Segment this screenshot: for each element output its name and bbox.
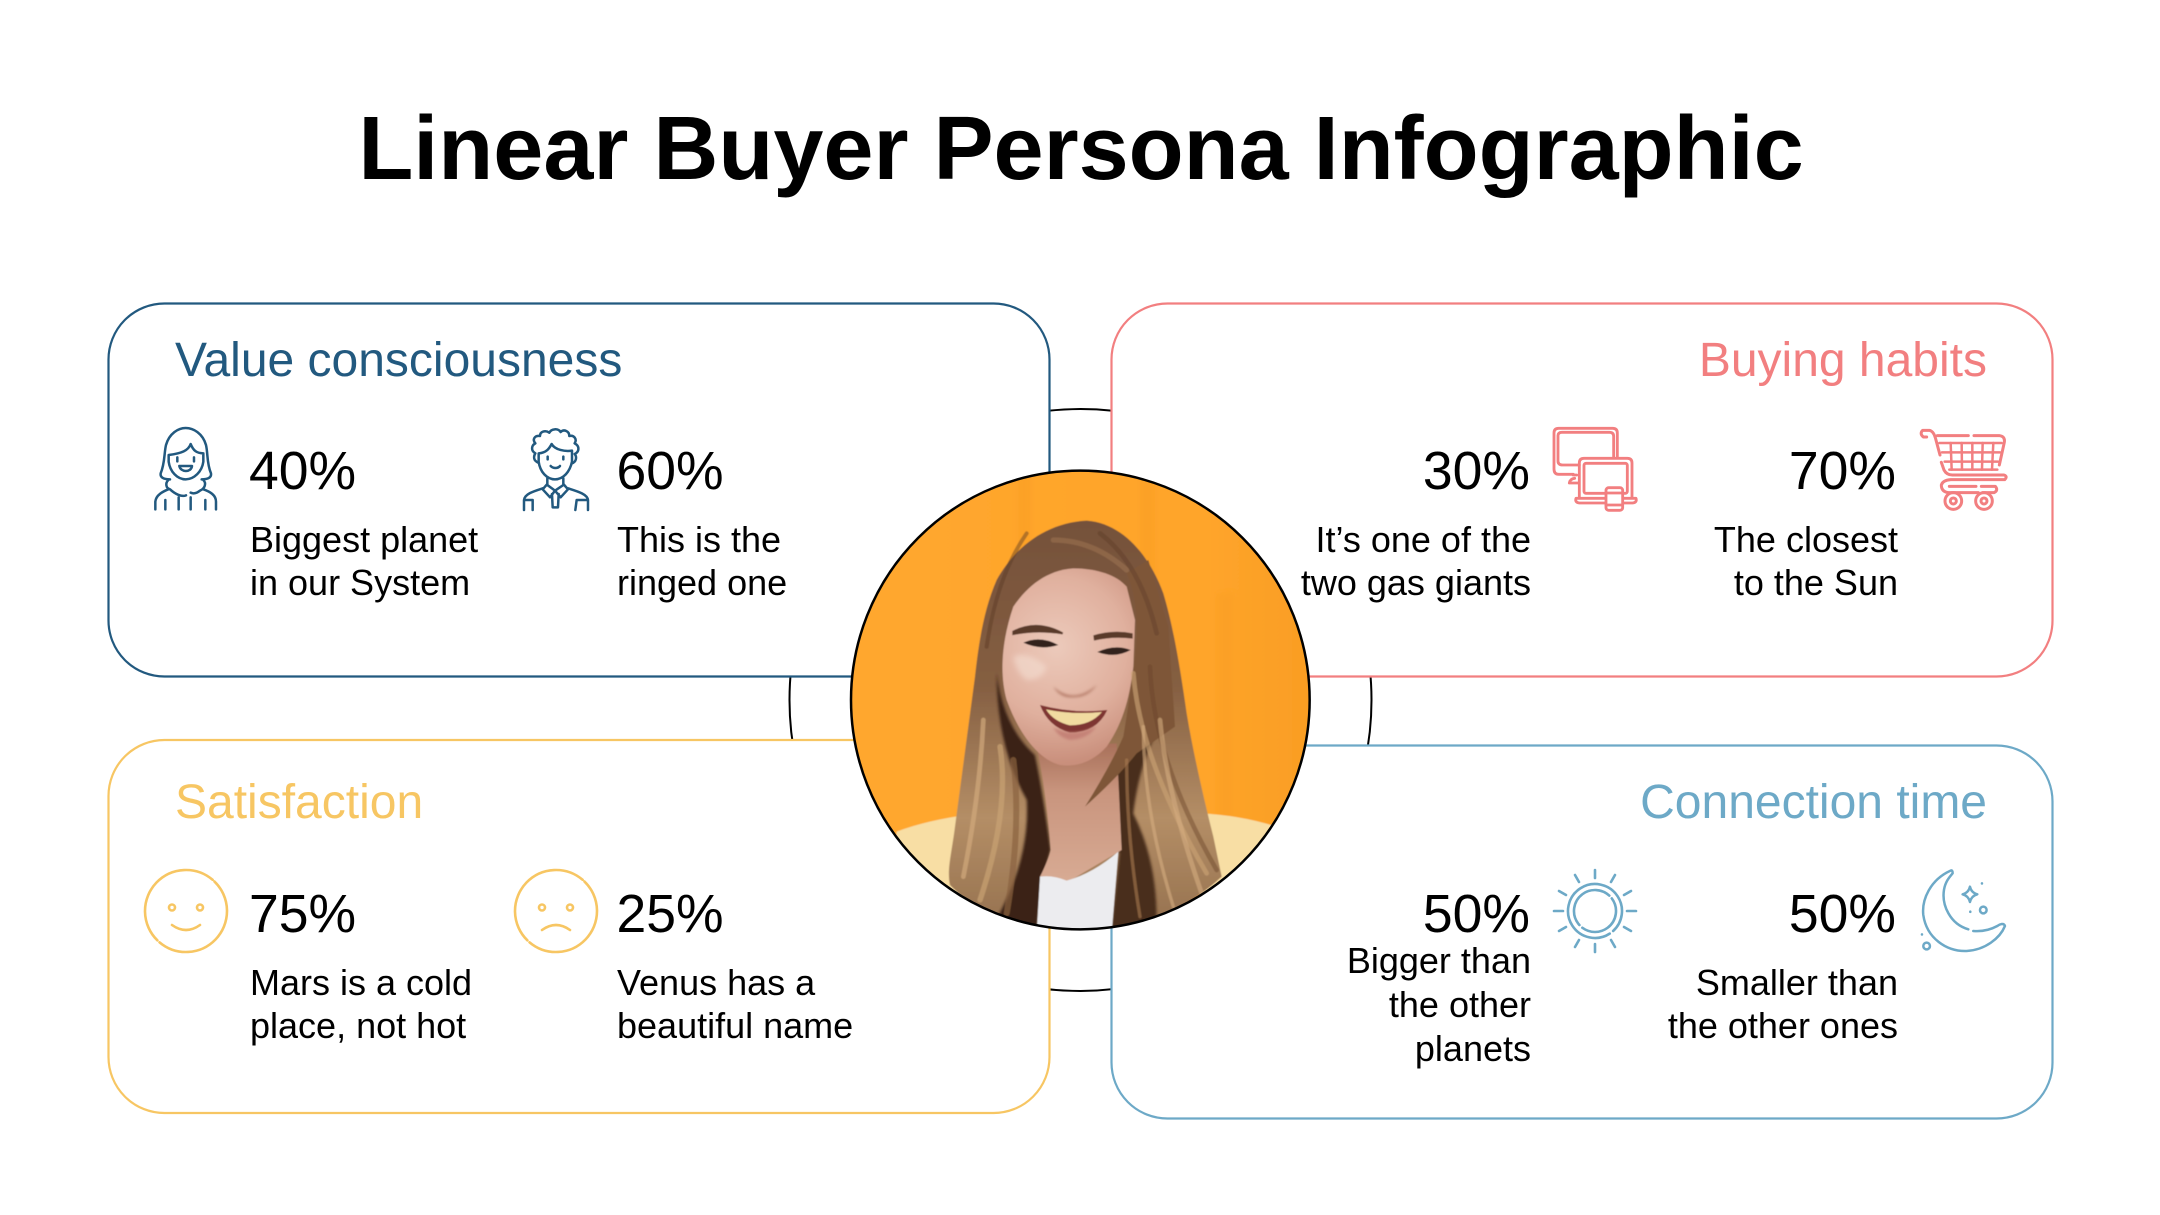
- stat: 25%: 25%: [616, 885, 724, 944]
- stat: 60%: 60%: [616, 442, 724, 501]
- panel outline: [108, 304, 1050, 676]
- text: smaller than: Smaller than: [1696, 962, 1898, 1003]
- icon: woman: [155, 428, 216, 509]
- stat: 70%: 70%: [1789, 442, 1896, 501]
- stat: 40%: 40%: [249, 442, 356, 501]
- text: biggest planet: Biggest planet: [250, 519, 478, 560]
- panel outline: [108, 740, 1050, 1113]
- stat: 75%: 75%: [249, 885, 356, 944]
- icon: cart: [1921, 430, 2006, 509]
- icon: devices: [1554, 428, 1636, 510]
- panel outline: [1112, 304, 2052, 676]
- text: ringed one: This is the: [617, 519, 781, 560]
- text: mars: place, not hot: [250, 1005, 466, 1046]
- text: closest to the sun: to the Sun: [1734, 562, 1898, 603]
- icon: moon: [1922, 870, 2005, 951]
- panel: buying habits: [1112, 304, 2052, 676]
- heading: value consciousness: Value consciousness: [175, 334, 622, 387]
- icon: sun: [1554, 870, 1636, 952]
- stat: 50% smaller: 50%: [1789, 885, 1896, 944]
- photo background: [852, 472, 1308, 903]
- panel outline: [1112, 746, 2052, 1118]
- panel: connection time: [1112, 746, 2052, 1118]
- panel: value consciousness: [108, 304, 1050, 676]
- connector ring behind panels: [790, 409, 1372, 991]
- heading: satisfaction: Satisfaction: [175, 776, 423, 829]
- text: gas giants: It’s one of the: [1316, 519, 1531, 560]
- heading: buying habits: Buying habits: [1699, 334, 1987, 387]
- panel: satisfaction: [108, 740, 1050, 1113]
- text: venus: beautiful name: [617, 1005, 853, 1046]
- text: closest to the sun: The closest: [1714, 519, 1898, 560]
- stat: 30%: 30%: [1423, 442, 1530, 501]
- text: mars: Mars is a cold: [250, 962, 472, 1003]
- photo: smiling woman in a circle: [840, 460, 1330, 940]
- text: bigger than: the other: [1389, 984, 1531, 1025]
- text: ringed one: ringed one: [617, 562, 787, 603]
- text: bigger than: Bigger than: [1347, 940, 1531, 981]
- text: smaller than: the other ones: [1668, 1005, 1898, 1046]
- text: venus: Venus has a: [617, 962, 815, 1003]
- heading: connection time: Connection time: [1640, 776, 1987, 829]
- stat: 50% bigger: 50%: [1423, 885, 1530, 944]
- text: gas giants: two gas giants: [1301, 562, 1531, 603]
- icon: sad face: [498, 853, 614, 969]
- photo border: [851, 471, 1310, 929]
- text: bigger than: planets: [1415, 1028, 1531, 1069]
- icon: man: [524, 429, 588, 510]
- title: Linear Buyer Persona Infographic: [358, 99, 1804, 199]
- icon: smiling face: [128, 853, 244, 969]
- text: biggest planet: in our System: [250, 562, 470, 603]
